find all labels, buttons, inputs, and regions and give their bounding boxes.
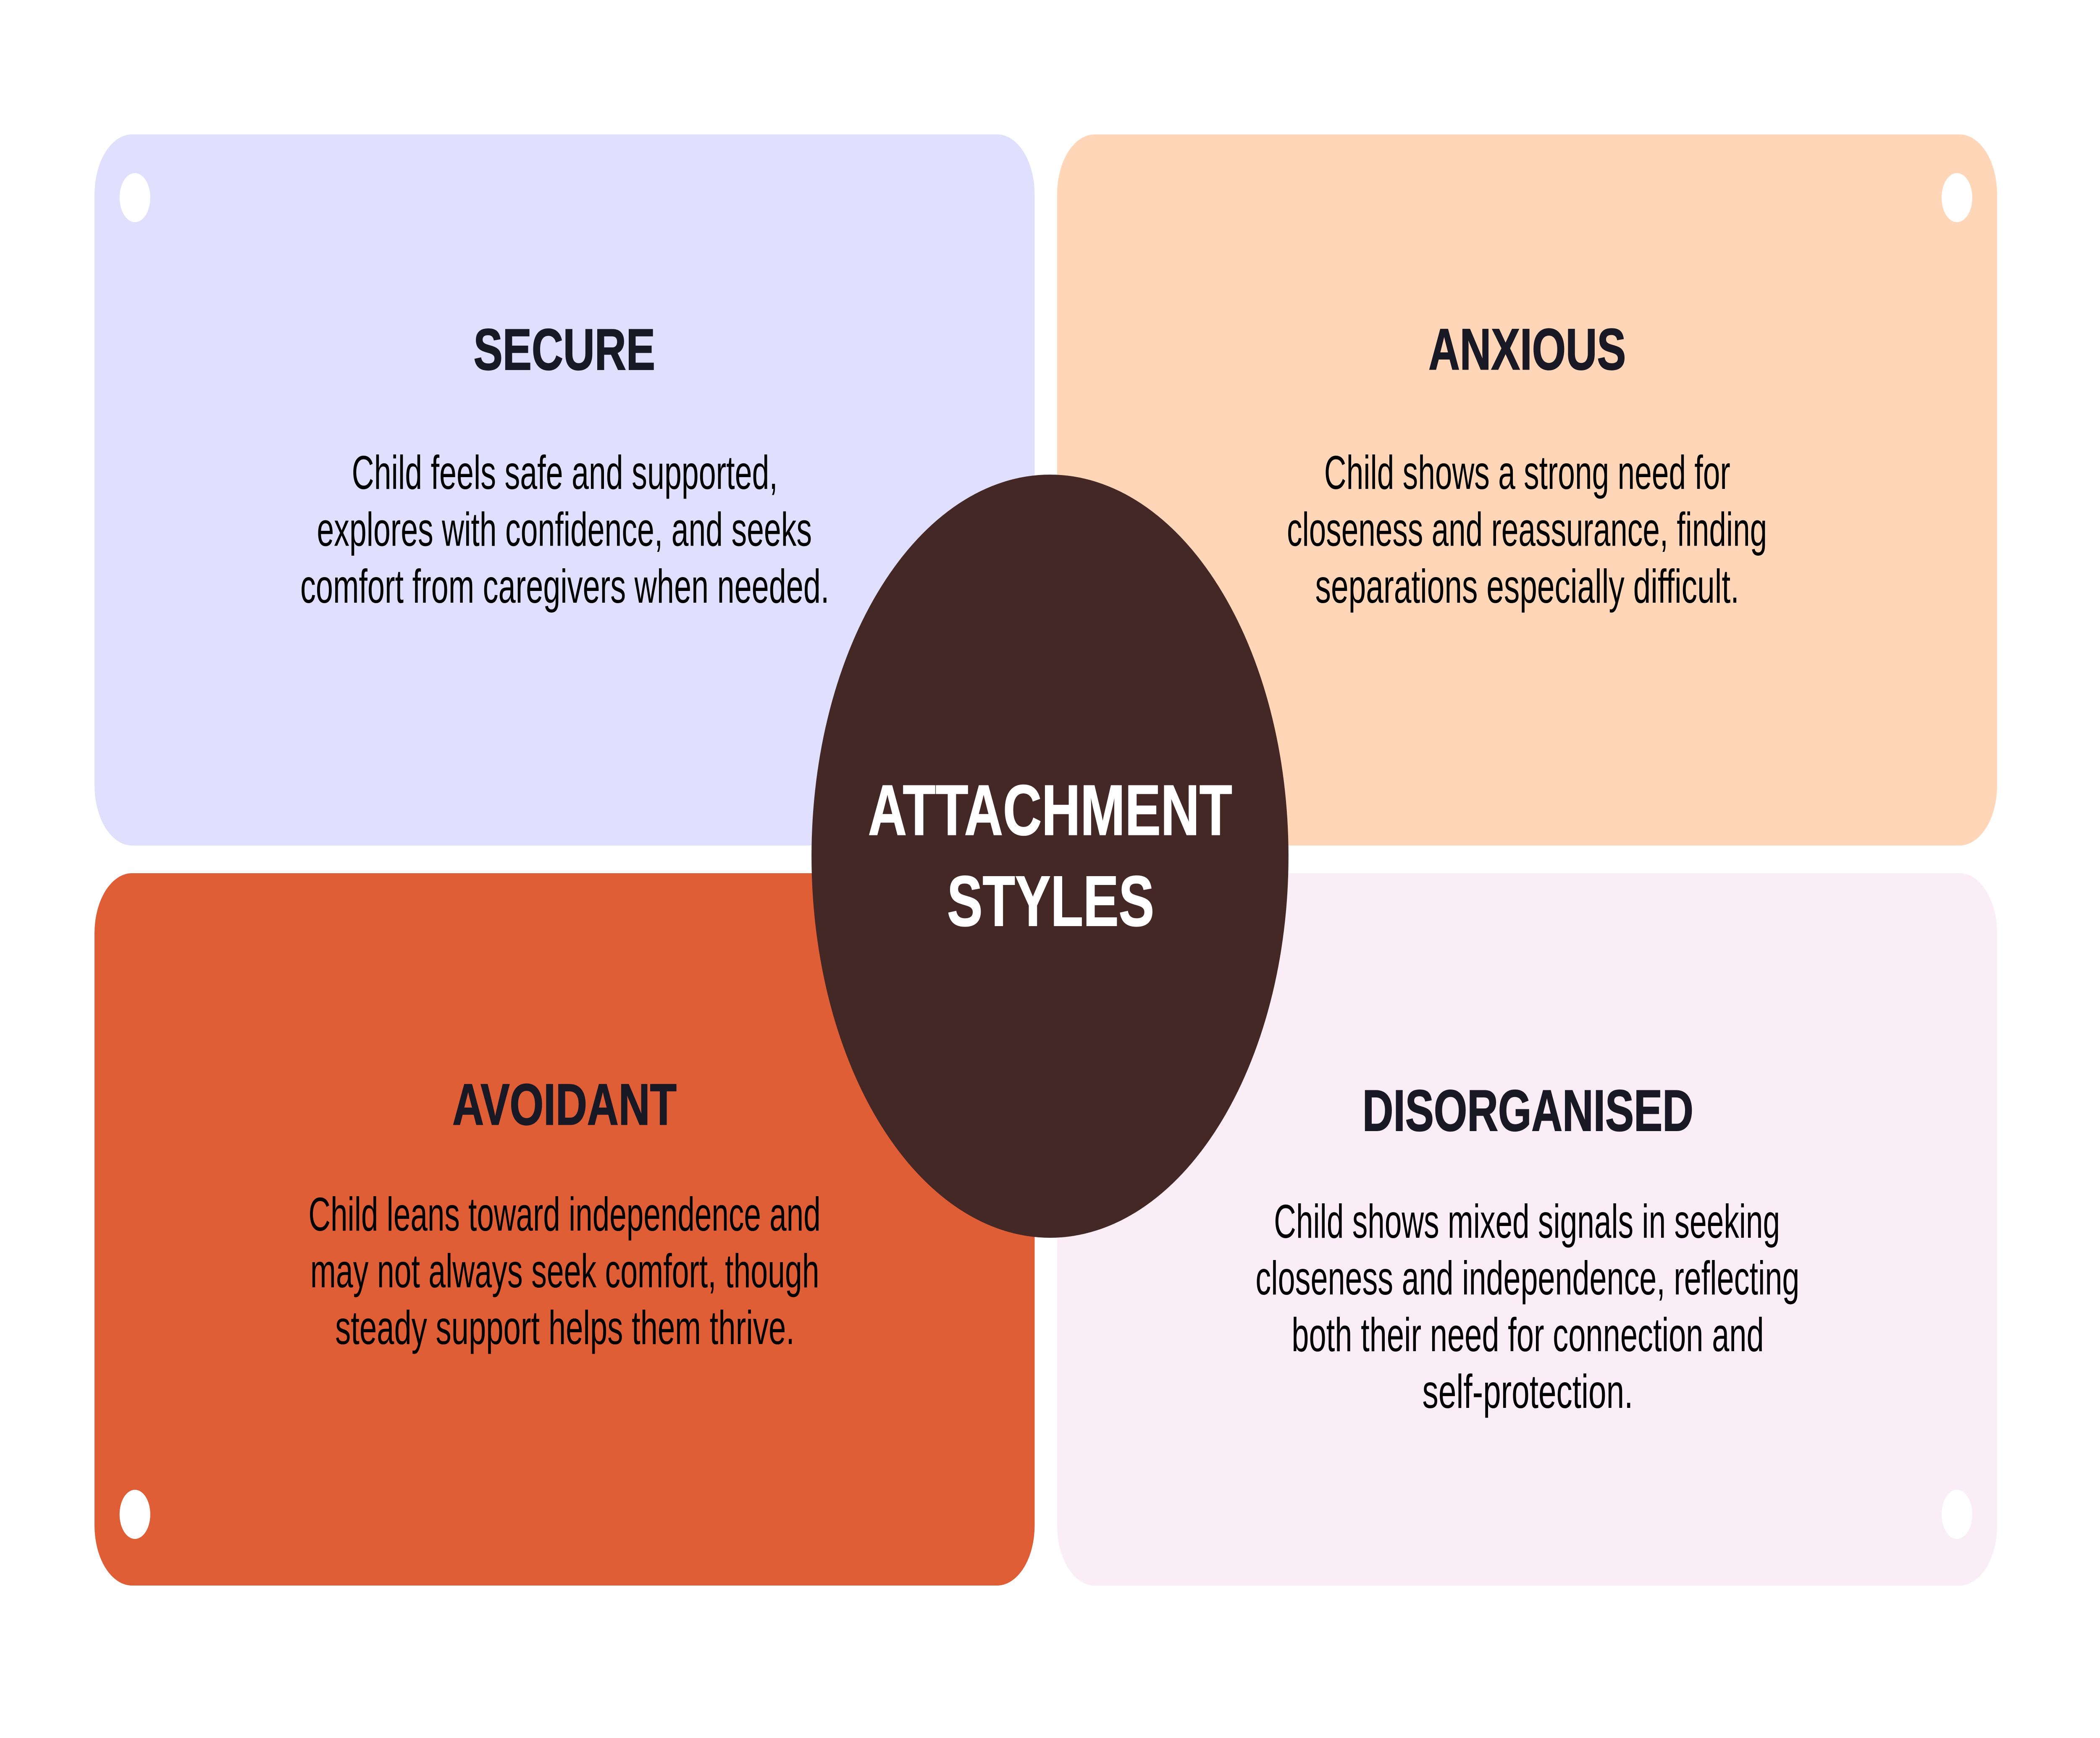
text block: disorganised description: closeness and independence, reflecting	[1255, 1252, 1799, 1305]
text block: secure description	[300, 446, 829, 613]
text block: disorganised description	[1255, 1195, 1799, 1418]
text block: anxious description	[1287, 446, 1767, 613]
panel background: anxious	[1057, 134, 1997, 845]
text block: anxious description: closeness and reassurance, finding	[1287, 503, 1767, 556]
panel background: secure	[94, 134, 1034, 845]
icon: corner dot	[120, 173, 150, 222]
heading: avoidant: AVOIDANT	[452, 1072, 677, 1137]
text block: disorganised description: Child shows mixed signals in seeking	[1274, 1195, 1780, 1248]
text block: avoidant description: Child leans toward independence and	[308, 1188, 821, 1241]
text block: disorganised description: both their need for connection and	[1292, 1308, 1764, 1361]
text block: anxious description: Child shows a strong need for	[1324, 446, 1730, 499]
text block: avoidant description	[308, 1188, 821, 1354]
text block: avoidant description: may not always seek comfort, though	[310, 1244, 819, 1297]
circle background	[811, 475, 1289, 1238]
icon: corner dot	[1942, 173, 1972, 222]
icon: corner dot	[120, 1490, 150, 1539]
central circle: attachment styles	[811, 475, 1289, 1238]
text block: anxious description: separations especially difficult.	[1315, 560, 1739, 613]
panel: secure	[94, 134, 1034, 845]
text block: avoidant description: steady support helps them thrive.	[335, 1301, 795, 1354]
title	[868, 771, 1232, 941]
heading: disorganised: DISORGANISED	[1362, 1078, 1693, 1143]
title: ATTACHMENT	[868, 771, 1232, 851]
panel: anxious	[1057, 134, 1997, 845]
panel: avoidant	[94, 873, 1034, 1586]
panel: disorganised	[1057, 873, 1997, 1586]
heading: secure: SECURE	[474, 317, 655, 382]
text block: secure description: explores with confidence, and seeks	[317, 503, 812, 556]
heading: anxious: ANXIOUS	[1428, 317, 1626, 382]
text block: secure description: comfort from caregivers when needed.	[300, 560, 829, 613]
text block: secure description: Child feels safe and supported,	[352, 446, 778, 499]
icon: corner dot	[1942, 1490, 1972, 1539]
title: STYLES	[947, 862, 1154, 941]
text block: disorganised description: self-protection.	[1423, 1365, 1633, 1418]
panel background: avoidant	[94, 873, 1034, 1586]
panel background: disorganised	[1057, 873, 1997, 1586]
